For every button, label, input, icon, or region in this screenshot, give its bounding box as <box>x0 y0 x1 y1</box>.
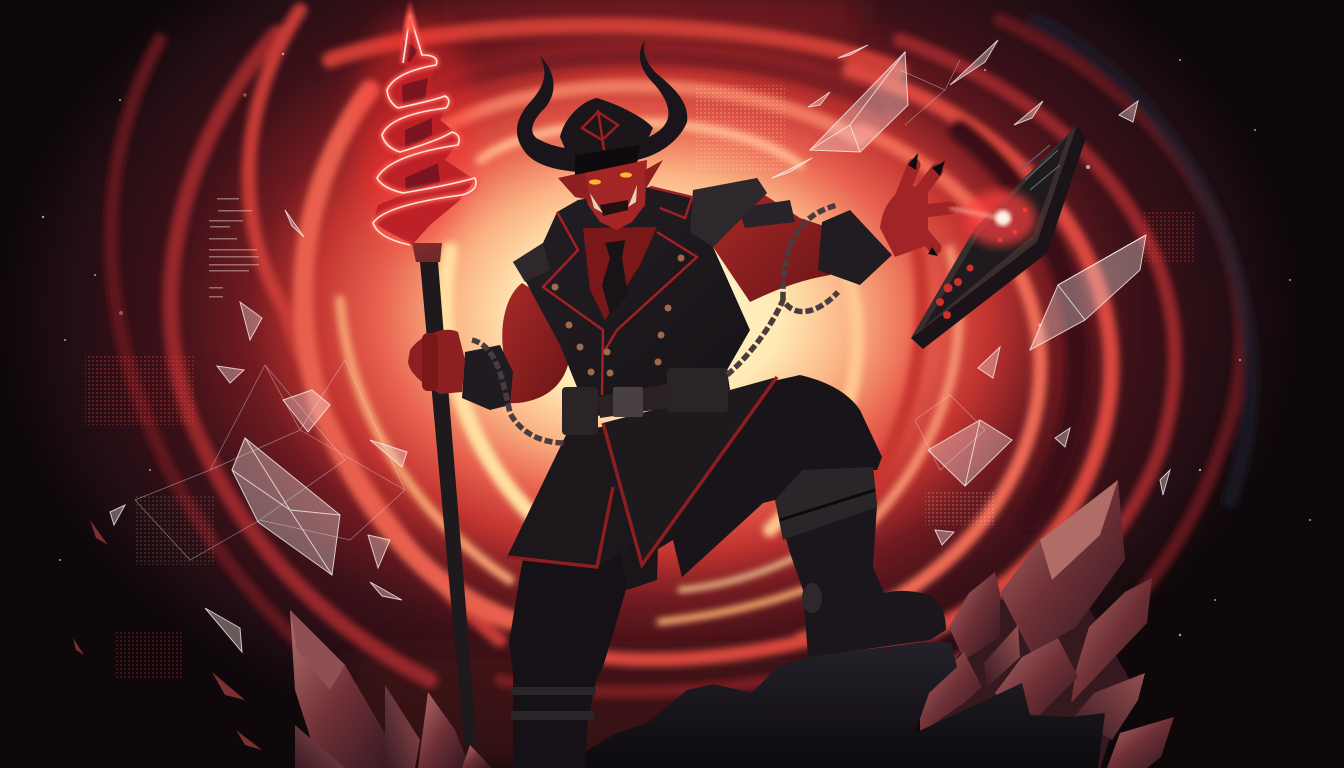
rear leg <box>509 540 640 768</box>
shard: upper right large <box>810 52 908 152</box>
shard: lower right <box>928 420 1012 486</box>
stars <box>42 53 1311 636</box>
crystals lower left <box>290 610 492 768</box>
floating glass shards <box>110 40 1170 652</box>
shirt and tie <box>583 227 657 320</box>
coat back flaps <box>620 500 763 590</box>
officer cap <box>560 98 653 175</box>
spear collar <box>412 243 442 262</box>
horns <box>517 40 687 172</box>
spear spiral head <box>373 1 476 245</box>
spear-hand fingers <box>422 333 438 391</box>
data panels and constellation lines <box>85 60 1194 680</box>
head <box>558 160 663 230</box>
coat skirt <box>507 377 777 567</box>
chains <box>472 205 838 443</box>
left hand <box>408 330 465 394</box>
glowing spiral spear <box>355 1 477 745</box>
coat torso <box>513 178 767 420</box>
demon figure <box>408 40 950 768</box>
spear glow <box>355 15 475 245</box>
spear shaft <box>420 262 477 745</box>
front skirt panel <box>603 377 777 565</box>
tusked mouth <box>600 200 628 216</box>
shard: large left crystal <box>232 438 340 575</box>
red shards lower left <box>73 520 262 750</box>
energy beam <box>950 190 1036 246</box>
eyes <box>589 172 632 185</box>
shard: right of tablet <box>1030 235 1146 350</box>
left skirt panel <box>507 420 640 567</box>
floating tablet <box>911 125 1086 349</box>
cuff <box>818 210 892 285</box>
crystals lower right <box>920 480 1174 768</box>
lapel trim <box>543 187 697 395</box>
left arm <box>408 283 570 410</box>
small shards <box>110 40 1170 652</box>
belt <box>562 368 728 435</box>
rock outcrop <box>558 642 1105 768</box>
coat buttons <box>552 254 684 376</box>
front thigh and boot <box>673 375 946 657</box>
right hand with claws <box>880 153 950 257</box>
rear boot straps <box>511 687 596 720</box>
shoulder epaulettes <box>513 178 767 282</box>
right arm <box>713 153 950 302</box>
